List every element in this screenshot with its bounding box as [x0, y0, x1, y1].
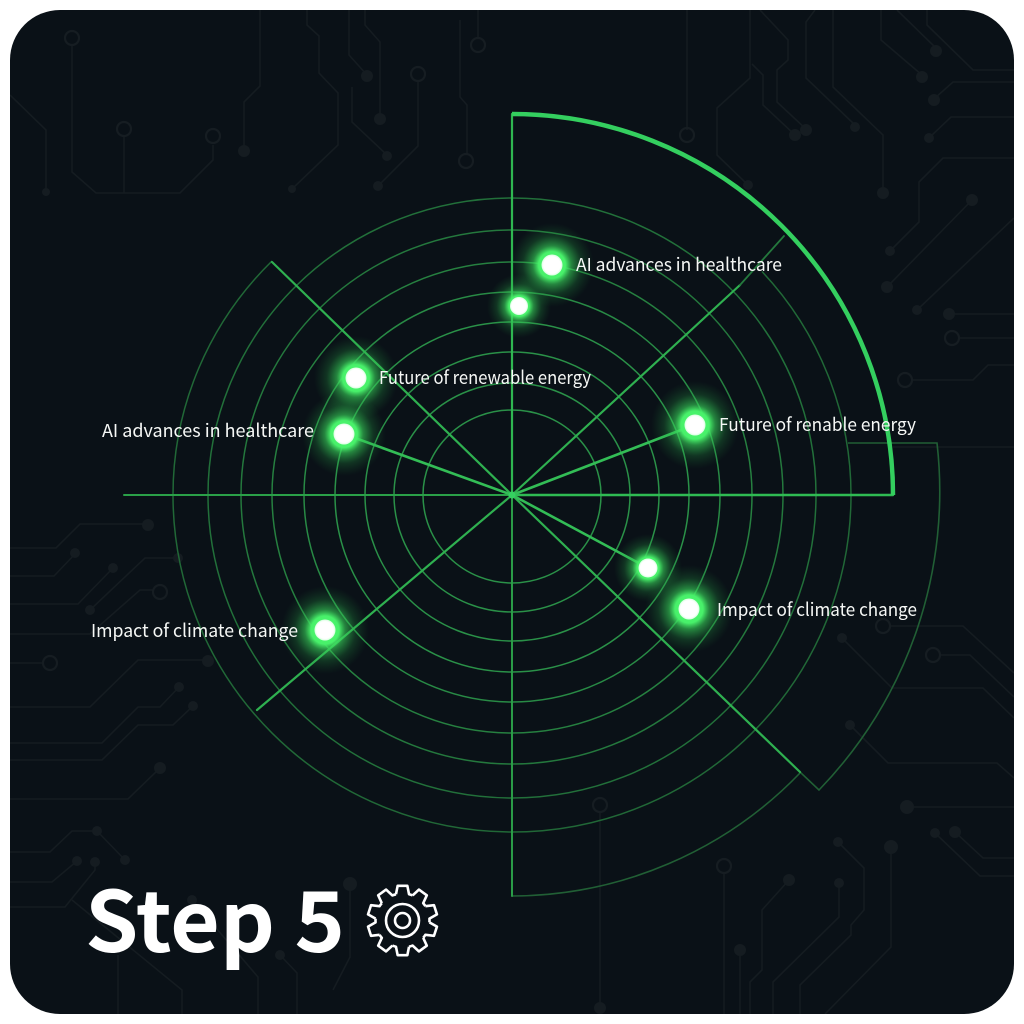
label: left climate: Impact of climate change	[91, 617, 298, 643]
outer bottom arc	[512, 773, 800, 896]
data point: top centre	[487, 274, 551, 338]
icon: gear	[366, 886, 439, 955]
data point: right	[651, 381, 739, 469]
radar chart	[124, 114, 940, 896]
data point: upper left	[314, 336, 398, 420]
concentric rings	[173, 198, 851, 832]
data point: lower right outer	[645, 565, 733, 653]
data point: left	[302, 392, 386, 476]
axes	[124, 114, 893, 896]
label: left healthcare: AI advances in healthcare	[102, 417, 314, 443]
radar centre	[508, 492, 516, 498]
data point: lower left	[281, 586, 369, 674]
label: top healthcare: AI advances in healthcare	[576, 251, 782, 277]
data point: lower right inner	[614, 534, 682, 602]
label: renewable energy: Future of renewable energy	[379, 364, 592, 390]
label: renable energy: Future of renable energy	[719, 411, 917, 437]
highlighted quadrant arc	[512, 114, 893, 495]
label: right climate: Impact of climate change	[717, 596, 917, 622]
outer right sector outline	[800, 443, 940, 790]
title: Step 5	[85, 856, 345, 977]
data point: top	[510, 223, 594, 307]
